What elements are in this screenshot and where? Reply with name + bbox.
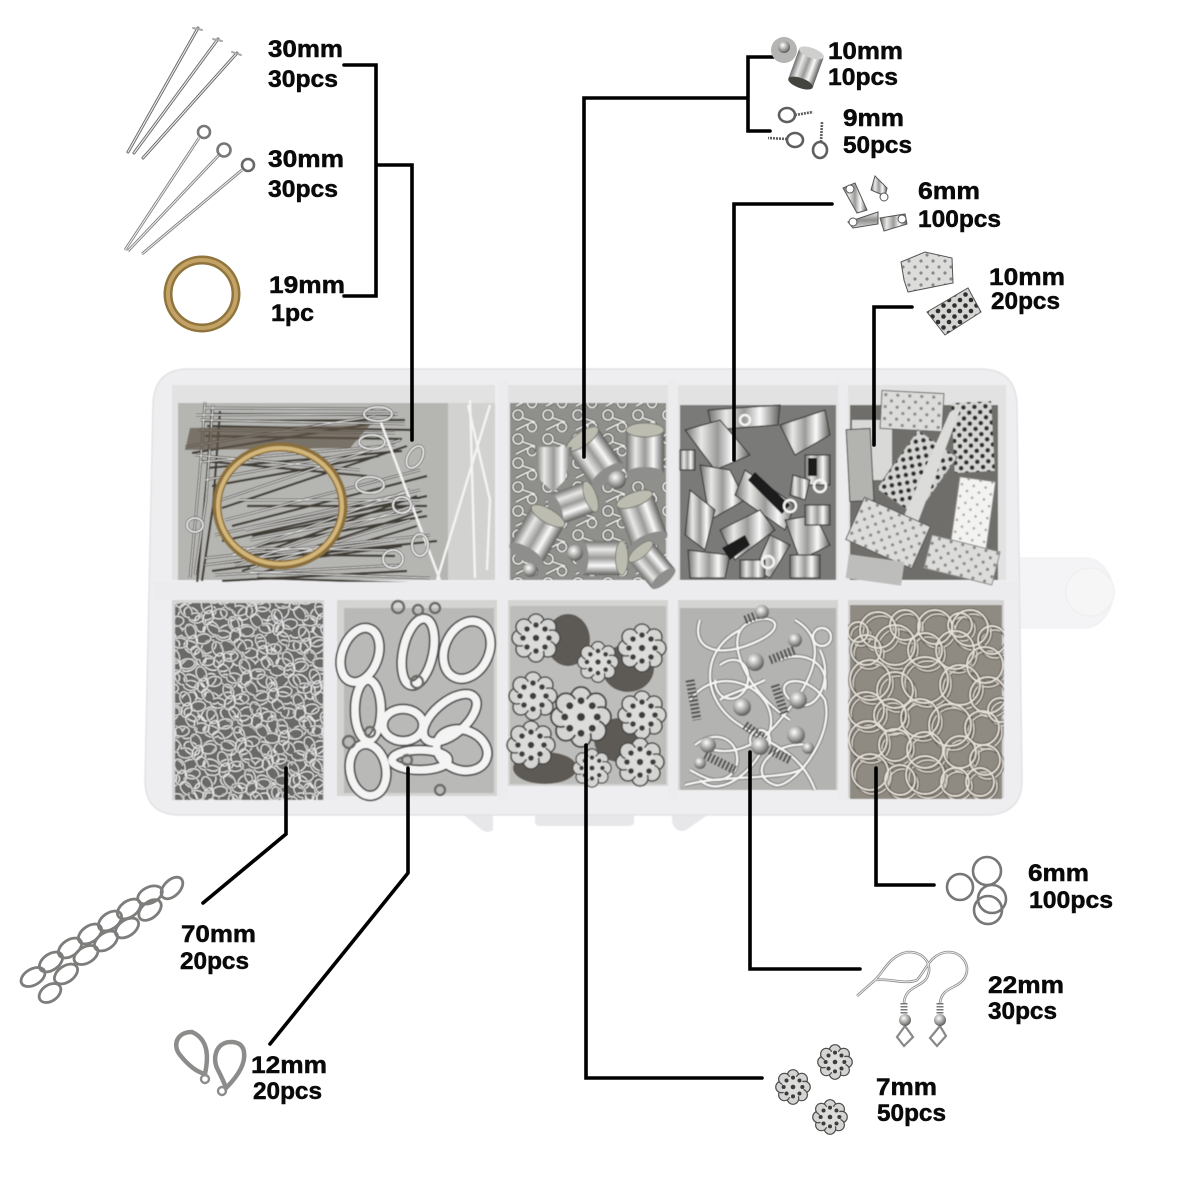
compartment floors	[172, 385, 1006, 580]
label: 70mm 20pcs: 70mm	[181, 921, 256, 948]
label: 10mm 10pcs: 10mm	[828, 38, 903, 65]
icon: jump rings	[947, 857, 1006, 924]
label: 19mm 1pc: 19mm	[269, 272, 345, 299]
label: 30mm 30pcs eye pins	[268, 146, 344, 203]
label: 30mm 30pcs eye pins: 30mm	[268, 146, 344, 173]
label: 30mm 30pcs head pins: 30pcs	[268, 66, 338, 93]
label: 22mm 30pcs: 22mm	[988, 972, 1064, 999]
icon: ear wires	[857, 952, 967, 1046]
compartment: jump rings	[848, 605, 1015, 800]
compartment: fold-over crimp ends	[680, 405, 836, 580]
compartment: lobster clasps	[334, 601, 500, 799]
label: 10mm 20pcs: 10mm	[989, 264, 1065, 291]
icon: gold memory ring	[168, 260, 236, 328]
label: 6mm 100pcs jump rings: 6mm	[1028, 860, 1089, 887]
bottom latch tabs	[460, 798, 712, 832]
label: 22mm 30pcs: 30pcs	[988, 998, 1057, 1025]
label: 6mm 100pcs	[918, 178, 1001, 233]
compartment: curb chain extenders	[175, 603, 323, 800]
label: 9mm 50pcs: 50pcs	[843, 132, 912, 159]
label: 12mm 20pcs	[251, 1052, 327, 1105]
compartment: screw eyes and cord ends	[506, 403, 679, 593]
label: 12mm 20pcs: 20pcs	[253, 1078, 322, 1105]
label: 12mm 20pcs: 12mm	[251, 1052, 327, 1079]
compartment: ear wire hooks	[680, 605, 836, 790]
label: 10mm 20pcs	[989, 264, 1065, 315]
label: 10mm 20pcs: 20pcs	[991, 288, 1060, 315]
label: 9mm 50pcs: 9mm	[843, 105, 904, 132]
icon: eye pins	[125, 126, 254, 254]
compartment: flower bead caps	[507, 606, 666, 787]
label: 19mm 1pc	[269, 272, 345, 327]
compartment: ribbon crimp clamps	[846, 390, 1000, 586]
label: 30mm 30pcs head pins: 30mm	[268, 36, 343, 63]
box shell	[145, 369, 1022, 815]
icon: cord end caps	[771, 37, 825, 92]
label: 10mm 10pcs	[828, 38, 903, 91]
leader lines	[203, 57, 934, 1078]
icon: head pins	[128, 28, 241, 158]
icon: ribbon clamps	[901, 252, 981, 335]
storage box with compartments	[145, 369, 1114, 832]
label: 70mm 20pcs	[180, 921, 256, 975]
icon: lobster clasps	[176, 1032, 244, 1095]
label: 30mm 30pcs head pins	[268, 36, 343, 93]
label: 7mm 50pcs: 7mm	[876, 1074, 937, 1101]
label: 6mm 100pcs jump rings: 100pcs	[1029, 887, 1113, 914]
label: 19mm 1pc: 1pc	[271, 300, 314, 327]
label: 30mm 30pcs eye pins: 30pcs	[268, 176, 338, 203]
label: 7mm 50pcs: 50pcs	[877, 1100, 946, 1127]
icon: crimp ends	[843, 176, 907, 231]
label: 6mm 100pcs: 100pcs	[918, 206, 1001, 233]
label: 10mm 10pcs: 10pcs	[828, 64, 898, 91]
icon: bead caps	[776, 1045, 852, 1134]
label: 7mm 50pcs	[876, 1074, 946, 1127]
icon: screw eye pins	[768, 108, 827, 158]
label: 6mm 100pcs: 6mm	[918, 178, 980, 205]
label: 70mm 20pcs: 20pcs	[180, 948, 249, 975]
icon: chain extenders	[18, 873, 187, 1006]
label: 22mm 30pcs	[988, 972, 1064, 1025]
label: 6mm 100pcs jump rings	[1028, 860, 1113, 914]
label: 9mm 50pcs	[843, 105, 912, 159]
compartment: head pins, eye pins and gold ring	[178, 400, 495, 584]
side tab with snap	[1018, 558, 1114, 628]
dividers	[153, 380, 1019, 800]
